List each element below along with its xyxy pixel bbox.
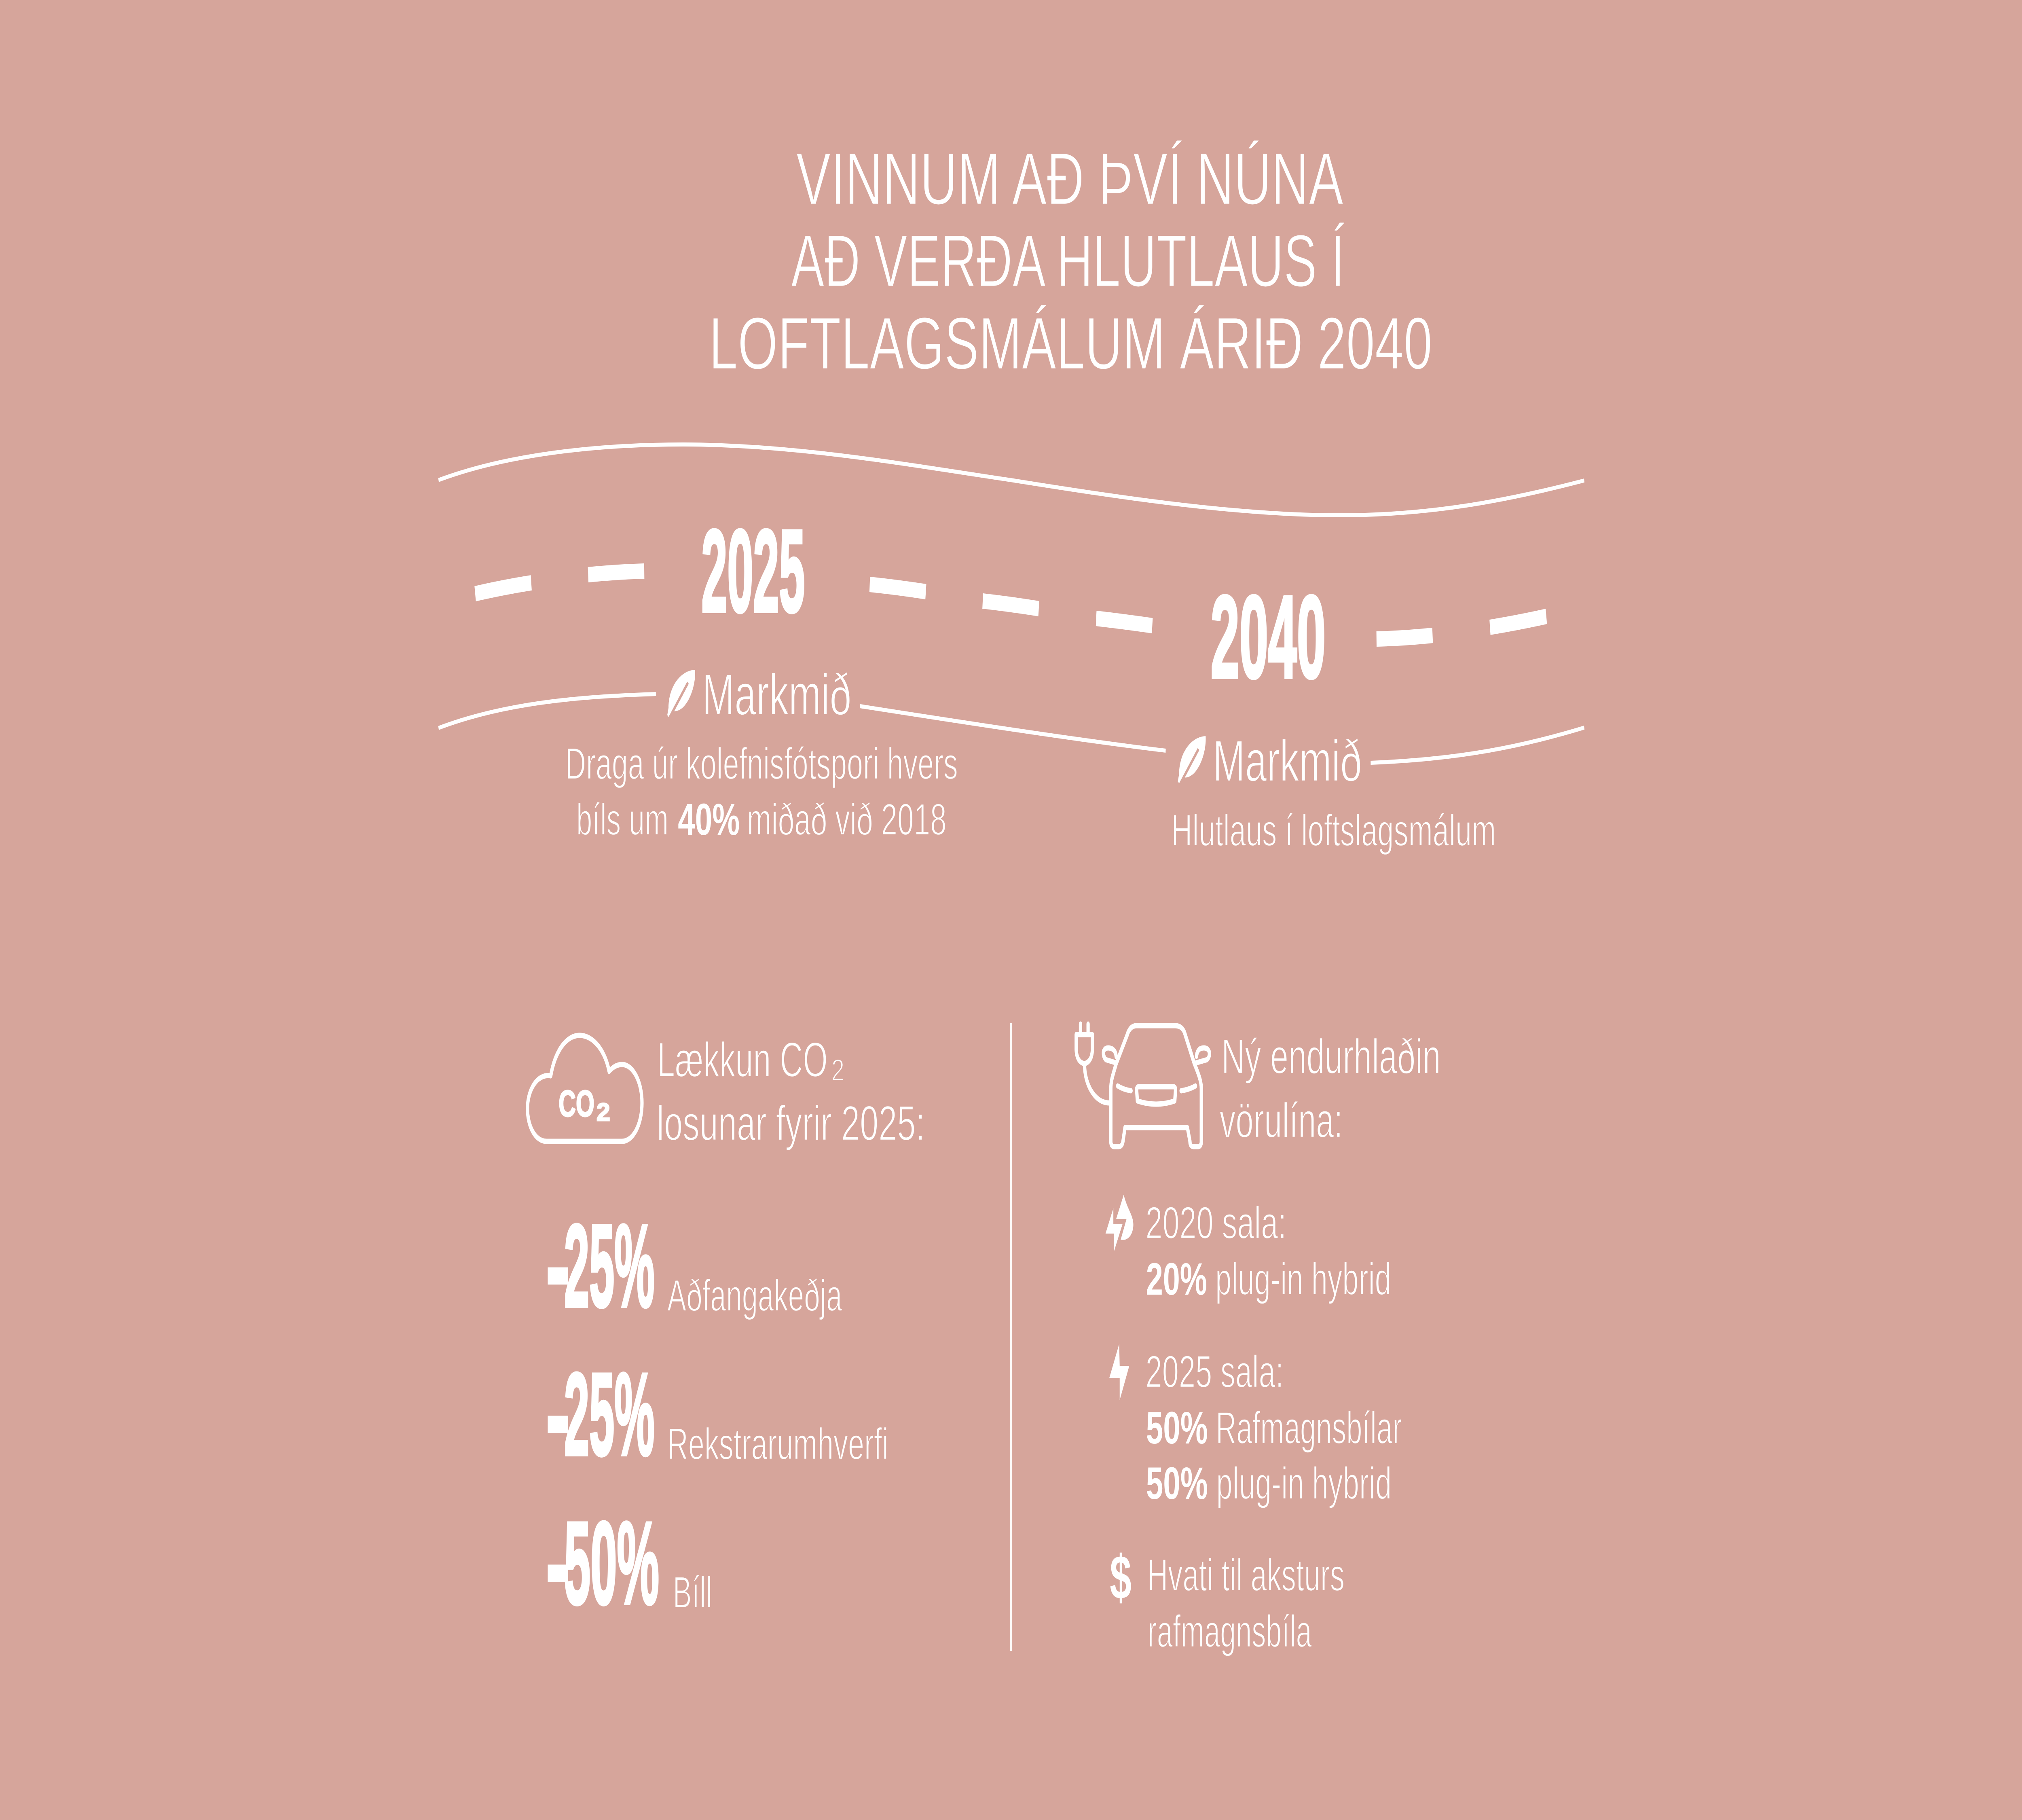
- icon: CO2 cloud: CO: [558, 1083, 594, 1124]
- item: 2025 sales: [1109, 1344, 1402, 1509]
- road: centre dashes: [475, 571, 1546, 639]
- item: EV driving incentive: [1110, 1543, 1345, 1657]
- heading: CO2 reduction: 2: [831, 1054, 844, 1088]
- heading: rechargeable line-up: Ný endurhlaðin: [1221, 1029, 1440, 1084]
- title: VINNUM AÐ ÞVÍ NÚNA: [796, 138, 1343, 220]
- stat: supply chain: -: [546, 1201, 570, 1331]
- year 2025: 2025: [701, 506, 805, 637]
- label: Markmið: Markmið: [702, 662, 851, 727]
- item: EV driving incentive: rafmagnsbíla: [1148, 1606, 1312, 1657]
- divider: [1010, 1023, 1012, 1651]
- stat: supply chain: 25%: [564, 1201, 655, 1331]
- icon: bolt and drop: [1106, 1195, 1133, 1251]
- stat: car: 50%: [564, 1498, 659, 1629]
- stat: supply chain: [546, 1201, 842, 1331]
- text: 2025 goal: 40%: [678, 795, 740, 844]
- stat: supply chain: Aðfangakeðja: [667, 1271, 842, 1321]
- text: 2025 goal: miðað við 2018: [747, 795, 947, 844]
- label: Markmið: Markmið: [1213, 728, 1362, 794]
- title: [709, 138, 1432, 385]
- item: 2025 sales: 50%: [1146, 1458, 1208, 1509]
- goal 2025: [565, 662, 958, 844]
- stat: operations: -: [546, 1349, 570, 1480]
- icon: plug-in car: [1076, 1024, 1210, 1147]
- title: AÐ VERÐA HLUTLAUS Í: [791, 220, 1345, 303]
- item: 2020 sales: 20%: [1146, 1253, 1207, 1304]
- panel: CO2 reduction: [527, 1032, 925, 1629]
- icon: leaf: [667, 670, 695, 722]
- item: EV driving incentive: Hvati til aksturs: [1147, 1549, 1345, 1600]
- road: lower edge: [438, 694, 1584, 763]
- item: 2025 sales: Rafmagnsbílar: [1216, 1402, 1402, 1453]
- heading: rechargeable line-up: [1220, 1029, 1440, 1148]
- item: 2020 sales: 2020 sala:: [1145, 1197, 1286, 1248]
- stat: operations: Rekstrarumhverfi: [667, 1420, 888, 1469]
- item: 2025 sales: plug-in hybrid: [1216, 1458, 1392, 1509]
- text: 2025 goal: Draga úr kolefnisfótspori hvers: [565, 739, 958, 789]
- stat: car: -: [546, 1498, 570, 1629]
- stat: car: Bíll: [673, 1568, 712, 1617]
- item: 2025 sales: 2025 sala:: [1145, 1346, 1284, 1397]
- title: LOFTLAGSMÁLUM ÁRIÐ 2040: [709, 303, 1432, 385]
- icon: bolt: [1109, 1344, 1129, 1400]
- item: 2020 sales: [1106, 1195, 1391, 1304]
- icon: dollar: $: [1110, 1543, 1132, 1613]
- heading: CO2 reduction: losunar fyrir 2025:: [657, 1096, 925, 1151]
- text: 2025 goal: [565, 739, 958, 844]
- stat: operations: 25%: [564, 1349, 655, 1480]
- item: 2020 sales: plug-in hybrid: [1215, 1253, 1391, 1304]
- panel: rechargeable line-up: [1076, 1024, 1440, 1657]
- icon: CO2 cloud: 2: [596, 1098, 610, 1126]
- text: 2025 goal: bíls um: [576, 795, 668, 844]
- heading: rechargeable line-up: vörulína:: [1220, 1093, 1343, 1148]
- heading: CO2 reduction: [657, 1032, 925, 1151]
- text: 2040 goal: Hlutlaus í loftslagsmálum: [1171, 806, 1496, 855]
- item: 2025 sales: 50%: [1146, 1402, 1208, 1453]
- stat: operations: [546, 1349, 888, 1480]
- heading: CO2 reduction: Lækkun CO: [657, 1032, 828, 1087]
- goal 2040: [1171, 728, 1496, 855]
- icon: leaf: [1178, 736, 1206, 788]
- icon: CO2 cloud: [527, 1035, 642, 1141]
- road: upper edge: [438, 444, 1584, 515]
- year 2040: 2040: [1211, 572, 1326, 703]
